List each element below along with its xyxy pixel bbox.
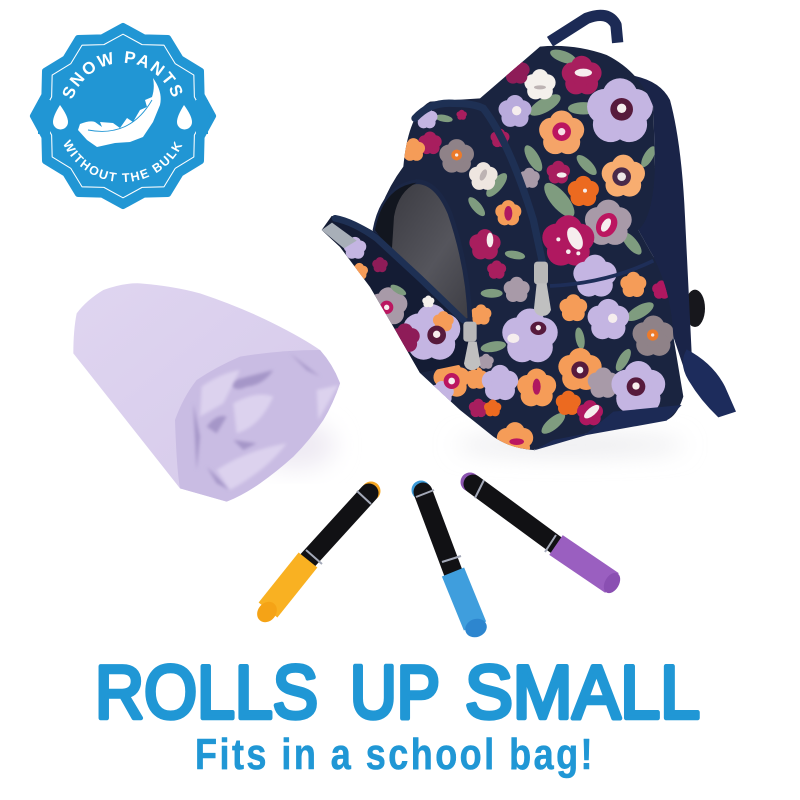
rolled snow pants [73,283,340,502]
roll outer fabric [73,283,340,502]
badge text: without the bulk: WITHOUT THE BULK [64,139,182,182]
title: rolls up small: UP [350,650,440,734]
flap grey tab [322,223,357,248]
flap print [344,237,460,360]
roll end folds [175,350,340,502]
roll highlights [200,370,338,490]
side buckle [685,290,705,327]
lower strap [683,349,736,417]
base panel [533,405,682,451]
flap zip [335,218,463,320]
zipper pull: main [534,262,551,316]
backpack [322,15,736,457]
orange marker [253,482,380,626]
title: rolls up small: SMALL [465,650,700,734]
purple marker [460,472,624,596]
badge text: snow pants: SNOW PANTS [62,51,182,98]
icon: feather [78,78,161,147]
zipper pull: flap [463,322,481,370]
shadows under products [255,421,685,469]
pocket flap [322,216,480,373]
title: rolls up small [95,650,700,734]
side pocket seam [550,261,653,286]
title: rolls up small: ROLLS [95,650,318,734]
markers [253,472,624,640]
flower centres [444,69,658,445]
blue marker [412,480,489,640]
top handle [550,15,618,43]
badge: snow pants without the bulk [30,22,216,210]
front zip [415,103,543,263]
backpack body [375,46,683,450]
subtitle: fits in a school bag: Fits in a school bag! [195,730,595,779]
icon: left water drop [53,105,68,130]
pocket inner rim [375,183,417,253]
shoulder strap [630,75,692,367]
roll fold shadows [193,353,320,490]
floral print [402,47,674,457]
open pocket interior [375,182,470,322]
icon: right water drop [177,105,192,130]
